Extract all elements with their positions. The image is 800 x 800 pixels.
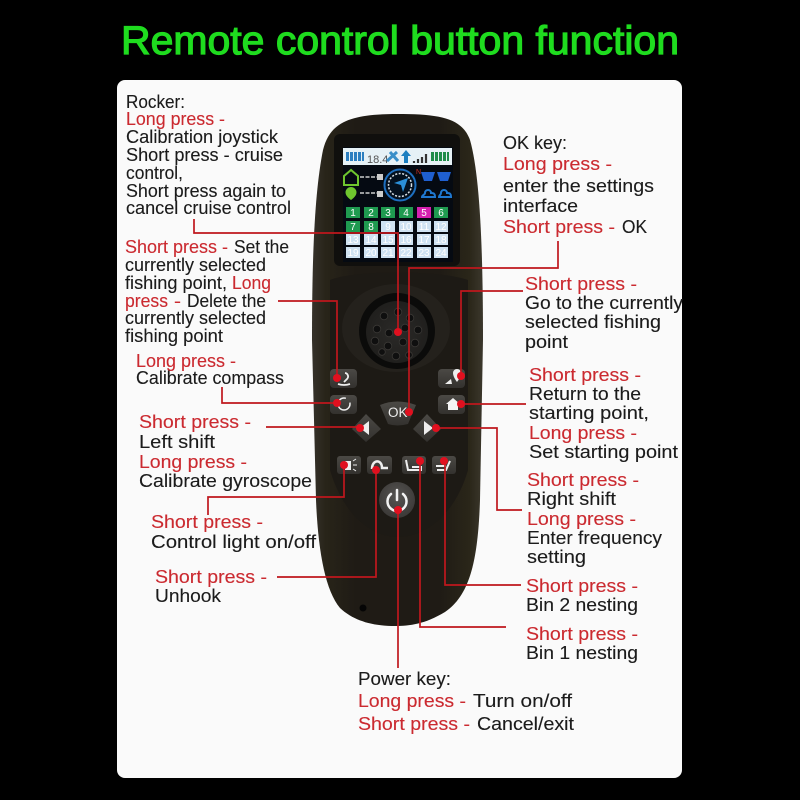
text: set or delete fishing point: press	[125, 290, 168, 311]
cell numbers: 7	[350, 222, 356, 233]
text: right shift: Short press -	[527, 469, 639, 490]
text: bin 2: Bin 2 nesting	[526, 594, 638, 615]
text: calibrate compass: Calibrate compass	[136, 367, 284, 388]
bin icons	[421, 172, 451, 181]
button: power	[379, 482, 415, 518]
cell numbers	[347, 208, 447, 259]
cell numbers: 18	[435, 235, 447, 246]
joystick	[342, 284, 450, 372]
text: right shift: Right shift	[527, 488, 617, 509]
cell numbers: 8	[368, 222, 374, 233]
text: left shift: Left shift	[139, 431, 216, 452]
text: right shift	[527, 469, 663, 567]
fishing point grid	[346, 207, 448, 259]
text: home	[529, 364, 679, 462]
text: bin 1	[526, 623, 638, 663]
text: right shift: setting	[527, 546, 586, 567]
text: calibrate compass: Long press -	[136, 350, 236, 371]
leader: light	[208, 465, 344, 515]
sensor hole	[360, 604, 366, 612]
text: left shift: Calibrate gyroscope	[139, 470, 312, 491]
text: unhook	[155, 566, 267, 606]
button: home	[438, 395, 465, 414]
text: OK key: enter the settings	[503, 175, 654, 196]
cell numbers: 11	[419, 222, 430, 233]
text: power key: Power key:	[358, 668, 451, 689]
text: rocker: Short press again to	[126, 180, 286, 201]
leader: unhook	[277, 470, 376, 577]
status bar background	[343, 148, 452, 165]
text: OK key: OK	[622, 216, 647, 237]
cell numbers: 4	[403, 208, 409, 219]
leader: left shift	[266, 426, 360, 428]
compass ring	[384, 170, 416, 200]
north mark: N	[416, 169, 421, 176]
text: bin 2	[526, 575, 638, 615]
text: power key: Long press -	[358, 690, 466, 711]
cell numbers: 17	[418, 235, 430, 246]
text: set or delete fishing point: currently selected	[125, 254, 266, 275]
leader: go to point	[461, 291, 523, 376]
lower face contour	[330, 272, 468, 537]
battery left	[346, 152, 364, 161]
button: light	[337, 456, 361, 474]
button: delete point	[330, 369, 357, 388]
text: rocker: Long press -	[126, 108, 225, 129]
leader lines	[194, 219, 558, 668]
text: rocker: Rocker:	[126, 91, 185, 112]
hook icons	[422, 190, 451, 197]
cell backgrounds green	[346, 207, 448, 232]
text: bin 2: Short press -	[526, 575, 638, 596]
text: power key: Cancel/exit	[477, 713, 575, 734]
text: power key	[358, 668, 575, 734]
button: OK: OK	[388, 405, 408, 420]
panel: white background	[117, 80, 682, 778]
text: set or delete fishing point: Delete the	[187, 290, 266, 311]
text: set or delete fishing point: fishing point	[125, 325, 224, 346]
cell numbers: 10	[400, 222, 412, 233]
text: rocker	[126, 91, 291, 218]
text: left shift: Short press -	[139, 411, 251, 432]
leader: home	[461, 403, 526, 405]
cell numbers: 21	[382, 248, 394, 259]
button: bin 1	[402, 456, 426, 474]
text: OK key: Short press -	[503, 216, 615, 237]
cell background magenta	[417, 207, 431, 218]
speed reading: 18.4	[367, 154, 388, 166]
remote body	[312, 114, 483, 626]
screen bezel	[334, 134, 460, 266]
cell numbers: 16	[400, 235, 412, 246]
leader: power	[397, 510, 399, 668]
screen	[343, 147, 453, 262]
text: bin 1: Bin 1 nesting	[526, 642, 638, 663]
button: unhook	[367, 456, 392, 474]
text: bin 1: Short press -	[526, 623, 638, 644]
leader dots	[333, 328, 465, 514]
text: OK key	[503, 132, 654, 237]
cell numbers: 20	[365, 248, 377, 259]
button: compass	[330, 395, 357, 414]
leader: rocker	[194, 219, 398, 332]
text: home: Short press -	[529, 364, 641, 385]
text: home: Long press -	[529, 422, 637, 443]
text: power key: Turn on/off	[473, 690, 573, 711]
text: go to point: Short press -	[525, 273, 637, 294]
cell numbers: 3	[385, 208, 391, 219]
text: unhook: Unhook	[155, 585, 222, 606]
up arrow	[401, 150, 411, 163]
cell numbers: 12	[435, 222, 447, 233]
text: set or delete fishing point: Long	[232, 272, 271, 293]
knob texture	[371, 308, 422, 360]
text: go to point: Go to the currently	[525, 292, 684, 313]
text: home: Set starting point	[529, 441, 679, 462]
text: go to point	[525, 273, 684, 352]
cell numbers: 14	[365, 235, 377, 246]
battery right	[431, 152, 449, 161]
text: home: starting point,	[529, 402, 649, 423]
text: light: Control light on/off	[151, 531, 317, 552]
cell numbers: 23	[418, 248, 430, 259]
dashed indicators	[360, 177, 377, 193]
text: OK key: OK key:	[503, 132, 567, 153]
text: right shift: Enter frequency	[527, 527, 663, 548]
cell backgrounds empty	[346, 221, 448, 258]
location icon	[346, 187, 356, 200]
text: set or delete fishing point: fishing point,	[125, 272, 227, 293]
text: home: Return to the	[529, 383, 641, 404]
cell numbers: 13	[347, 235, 359, 246]
compass inner ring	[388, 174, 412, 196]
cell numbers: 15	[382, 235, 394, 246]
text: set or delete fishing point: Set the	[234, 236, 289, 257]
text: unhook: Short press -	[155, 566, 267, 587]
text: rocker: Short press - cruise	[126, 144, 283, 165]
text: right shift: Long press -	[527, 508, 636, 529]
joystick well	[359, 293, 435, 369]
joystick knob	[366, 301, 428, 363]
text: set or delete fishing point: -	[174, 290, 181, 311]
cell numbers: 5	[421, 208, 427, 219]
text: go to point: point	[525, 331, 569, 352]
text: light	[151, 511, 317, 552]
cell numbers: 22	[400, 248, 412, 259]
text: left shift: Long press -	[139, 451, 247, 472]
cell numbers: 9	[385, 222, 391, 233]
text: rocker: control,	[126, 162, 183, 183]
text: light: Short press -	[151, 511, 263, 532]
signal bars	[414, 154, 426, 163]
cell numbers: 6	[438, 208, 444, 219]
leader: bin 1	[420, 461, 506, 627]
remote control	[312, 114, 483, 626]
button: left arrow	[352, 414, 381, 442]
text: calibrate compass	[136, 350, 284, 388]
cell numbers: 1	[350, 208, 356, 219]
text: OK key: interface	[503, 195, 578, 216]
leader: bin 2	[445, 461, 521, 585]
leader: compass	[222, 387, 337, 403]
satellite icon	[387, 152, 398, 161]
leader: delete point	[278, 301, 337, 378]
text: set or delete fishing point	[125, 236, 289, 346]
text: go to point: selected fishing	[525, 311, 661, 332]
cell numbers: 2	[368, 208, 374, 219]
joystick outer ring	[342, 284, 450, 372]
text: power key: Short press -	[358, 713, 470, 734]
compass needle	[394, 178, 408, 192]
home icon	[344, 170, 358, 185]
cell numbers: 24	[435, 248, 447, 259]
text: rocker: Calibration joystick	[126, 126, 279, 147]
text: set or delete fishing point: currently selected	[125, 307, 266, 328]
leader: OK key	[409, 241, 558, 412]
title: Remote control button function	[121, 19, 679, 63]
text: OK key: Long press -	[503, 153, 612, 174]
button: OK	[380, 402, 416, 426]
text: set or delete fishing point: Short press -	[125, 236, 228, 257]
text: rocker: cancel cruise control	[126, 197, 291, 218]
screen background	[343, 147, 453, 262]
cell numbers: 19	[347, 248, 359, 259]
text: left shift	[139, 411, 312, 491]
button: go to point	[438, 369, 465, 388]
indicator squares	[377, 174, 383, 197]
button: bin 2	[432, 456, 456, 474]
button: right arrow	[413, 414, 441, 442]
leader: right shift	[436, 428, 522, 510]
